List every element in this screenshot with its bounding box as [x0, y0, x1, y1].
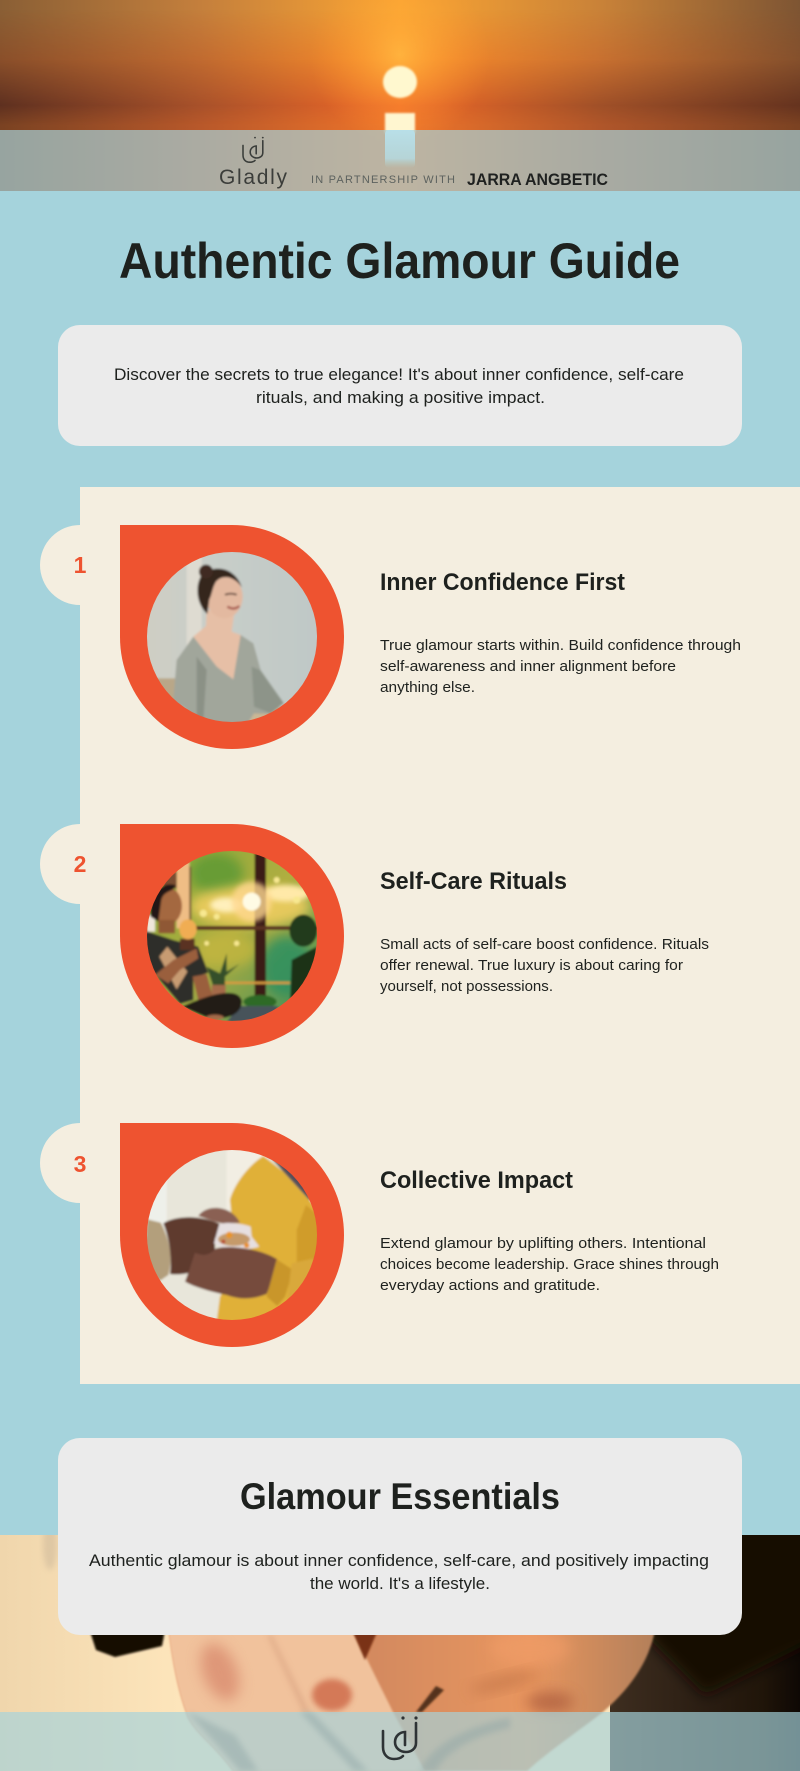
step 3 text: Extend glamour by uplifting others. Intentional [380, 1235, 706, 1252]
step 2 text: yourself, not possessions. [380, 978, 553, 995]
essentials text: the world. It's a lifestyle. [310, 1574, 490, 1593]
panel: steps background [80, 487, 800, 1384]
number badge 2 [40, 824, 86, 904]
step 2 text: Small acts of self-care boost confidence. Rituals [380, 936, 709, 953]
step 3 heading: Collective Impact [380, 1167, 573, 1194]
step 2 text: offer renewal. True luxury is about caring for [380, 957, 683, 974]
reflection in strip [385, 130, 415, 168]
drop frame 3 [120, 1123, 344, 1347]
intro text: Discover the secrets to true elegance! It's about inner confidence, self-care [114, 365, 684, 384]
step 1 heading: Inner Confidence First [380, 569, 625, 596]
logo strip overlay [0, 130, 800, 191]
step 1 text [380, 637, 741, 696]
step 1 [40, 525, 741, 749]
step 3 text [380, 1235, 719, 1294]
panel: Glamour Essentials [58, 1438, 742, 1635]
step 2 heading: Self-Care Rituals [380, 868, 567, 895]
header banner: sunset photo with logo strip [0, 0, 800, 191]
number badge 2: 2 [74, 851, 86, 877]
panel: intro [58, 325, 742, 446]
step 1 text: anything else. [380, 679, 475, 696]
step 2 [40, 824, 709, 1048]
step 3 [40, 1123, 719, 1347]
essentials text [89, 1551, 709, 1593]
sun reflection [385, 113, 415, 133]
step 2 text [380, 936, 709, 995]
title: Authentic Glamour Guide [119, 233, 680, 289]
sun [383, 66, 417, 98]
hands photo [0, 1520, 800, 1771]
step 1 text: self-awareness and inner alignment before [380, 658, 676, 675]
logo: Gladly wordmark: Gladly [219, 166, 288, 189]
footer logo mark [383, 1716, 418, 1759]
step 3 text: choices become leadership. Grace shines through [380, 1256, 719, 1273]
photo: woman meditating [147, 552, 317, 722]
footer logo strip overlay [0, 1712, 800, 1771]
photo: sharing food between hands [147, 1150, 317, 1320]
essentials heading: Glamour Essentials [240, 1476, 560, 1517]
intro text: rituals, and making a positive impact. [256, 388, 545, 407]
footer photo: clasped hands with logo strip [0, 1520, 800, 1771]
logo: Gladly mark [243, 137, 264, 162]
drop frame 2 [120, 824, 344, 1048]
number badge 1: 1 [74, 552, 87, 578]
partner name: JARRA ANGBETIC [467, 170, 608, 189]
drop frame 1 [120, 525, 344, 749]
essentials text: Authentic glamour is about inner confidence, self-care, and positively impacting [89, 1551, 709, 1570]
step 1 text: True glamour starts within. Build confidence through [380, 637, 741, 654]
number badge 3: 3 [74, 1151, 86, 1177]
partnership label: IN PARTNERSHIP WITH [311, 174, 455, 186]
number badge 3 [40, 1123, 86, 1203]
number badge 1 [40, 525, 87, 605]
step 3 text: everyday actions and gratitude. [380, 1277, 600, 1294]
hand shading in strip [188, 1712, 510, 1771]
intro text [114, 365, 684, 407]
sunset sky [0, 0, 800, 191]
photo: man with tea by window [147, 851, 317, 1021]
